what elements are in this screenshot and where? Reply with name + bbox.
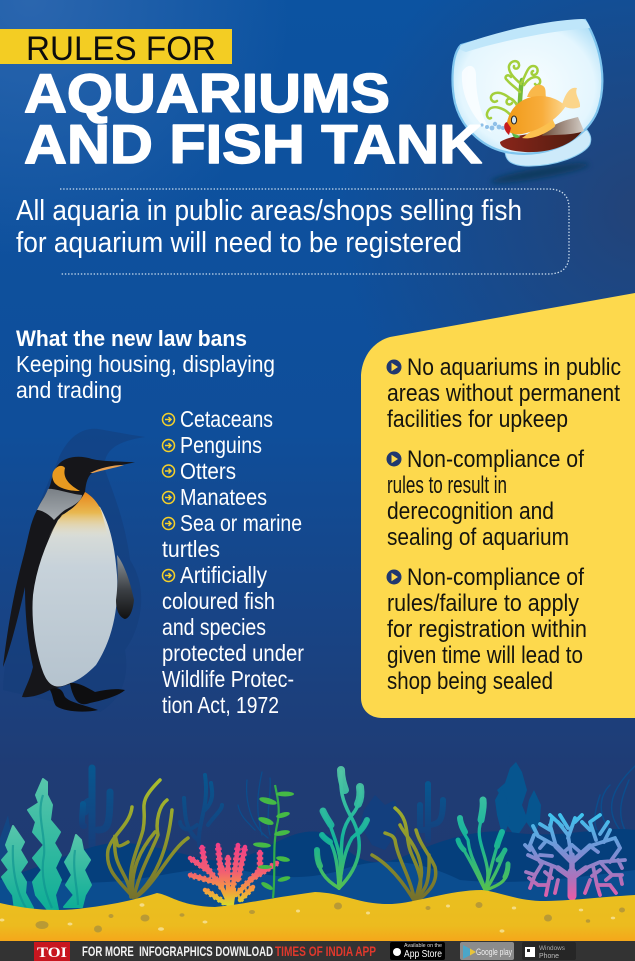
panel: yellow rules panel bbox=[361, 293, 635, 718]
callout: registration statement: for aquarium will need to be registered bbox=[16, 227, 462, 259]
badge: app store: Available on the bbox=[404, 943, 442, 949]
list: banned species: Sea or marine bbox=[180, 510, 302, 536]
list: banned species: coloured fish bbox=[162, 588, 275, 614]
heading: what the new law bans bbox=[16, 326, 275, 403]
footer text: TIMES OF INDIA APP bbox=[275, 943, 376, 959]
icon: fish bowl bbox=[453, 19, 602, 187]
rule: registration failure bbox=[386, 564, 587, 695]
illustration: olive seaweed right bbox=[372, 808, 436, 902]
list: banned species: Penguins bbox=[180, 432, 262, 458]
heading: what the new law bans: Keeping housing, displaying bbox=[16, 351, 275, 377]
rule: derecognition bbox=[386, 446, 584, 551]
rule: registration failure: given time will lead to bbox=[387, 642, 583, 669]
title: aquariums and fish tank bbox=[24, 62, 482, 175]
icon: bubbles bbox=[480, 122, 505, 130]
footer bar bbox=[0, 941, 635, 961]
list: banned species: turtles bbox=[162, 536, 220, 562]
illustration: background plants and hills bbox=[0, 762, 635, 915]
list: banned species: and species bbox=[162, 614, 266, 640]
icon: plant in bowl bbox=[487, 61, 540, 120]
badge: google play bbox=[460, 942, 514, 960]
icon: floor and rock bbox=[500, 130, 583, 152]
rule: registration failure: Non-compliance of bbox=[407, 564, 584, 591]
heading: what the new law bans: What the new law bans bbox=[16, 326, 247, 351]
rule: public areas bbox=[386, 354, 621, 433]
icon: goldfish bbox=[504, 85, 580, 138]
heading: what the new law bans: and trading bbox=[16, 377, 122, 403]
badge: app store: App Store bbox=[404, 949, 442, 960]
title: aquariums and fish tank: AQUARIUMS bbox=[24, 62, 390, 124]
callout: registration statement: All aquaria in public areas/shops selling fish bbox=[16, 195, 522, 227]
title: aquariums and fish tank: AND FISH TANK bbox=[24, 113, 482, 175]
badge: windows phone: Windows bbox=[539, 946, 565, 952]
rule: derecognition: sealing of aquarium bbox=[387, 524, 569, 551]
list: banned species: Manatees bbox=[180, 484, 267, 510]
rule: derecognition: rules to result in bbox=[387, 472, 507, 499]
list: banned species: Otters bbox=[180, 458, 236, 484]
badge: windows phone: Phone bbox=[539, 953, 559, 960]
footer text: FOR MORE INFOGRAPHICS DOWNLOAD bbox=[82, 943, 273, 959]
illustration: king penguin bbox=[3, 429, 145, 712]
rule: derecognition: derecognition and bbox=[387, 498, 554, 525]
badge: app store bbox=[390, 942, 445, 960]
icons: list bullets bbox=[162, 414, 174, 582]
illustration: olive seaweed left bbox=[108, 780, 188, 897]
logo: toi: TOI bbox=[37, 945, 67, 961]
illustration: pink coral bbox=[190, 845, 277, 905]
rule: registration failure: rules/failure to apply bbox=[387, 590, 579, 617]
rule: registration failure: for registration within bbox=[387, 616, 587, 643]
list: banned species bbox=[162, 406, 304, 718]
illustration: sand and pebbles bbox=[0, 890, 635, 941]
rule: derecognition: Non-compliance of bbox=[407, 446, 584, 473]
logo: toi bbox=[34, 942, 70, 961]
illustration: blue and pink coral bbox=[525, 815, 625, 896]
list: banned species: Cetaceans bbox=[180, 406, 273, 432]
rule: public areas: facilities for upkeep bbox=[387, 406, 568, 433]
list: banned species: Wildlife Protec- bbox=[162, 666, 294, 692]
callout: registration statement bbox=[16, 189, 569, 274]
illustration: green seaweed centre bbox=[317, 770, 367, 888]
title banner: rules for: RULES FOR bbox=[26, 30, 216, 68]
illustration: green vine bbox=[253, 785, 294, 898]
rule: registration failure: shop being sealed bbox=[387, 668, 553, 695]
list: banned species: protected under bbox=[162, 640, 304, 666]
illustration: green seaweed right bbox=[458, 800, 508, 890]
badge: google play: Google play bbox=[476, 947, 512, 957]
list: banned species: tion Act, 1972 bbox=[162, 692, 279, 718]
list: banned species: Artificially bbox=[180, 562, 267, 588]
illustration: green kelp bbox=[2, 779, 91, 910]
badge: windows phone bbox=[522, 942, 576, 960]
